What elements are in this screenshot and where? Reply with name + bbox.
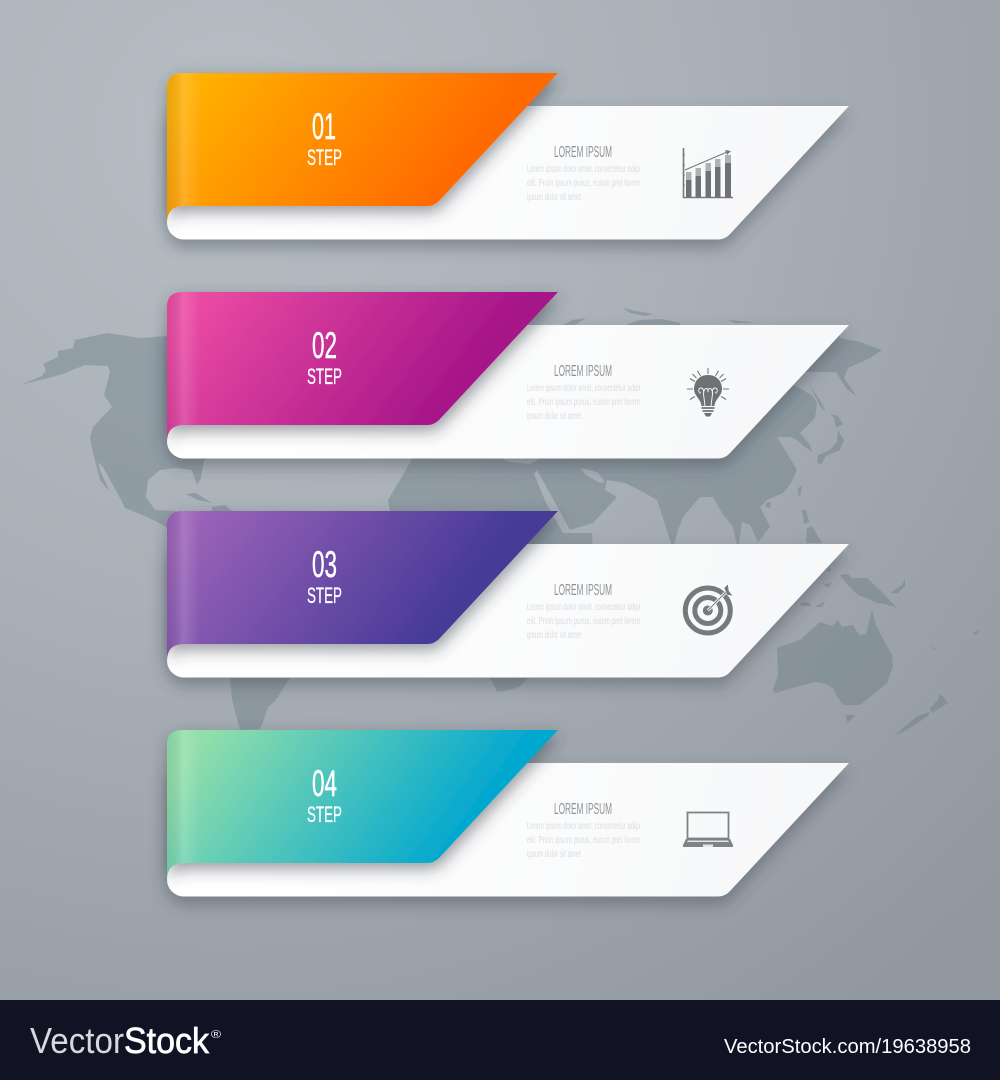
white card 2 bbox=[167, 325, 849, 458]
step 4 bbox=[167, 730, 849, 896]
icon: laptop bbox=[683, 812, 733, 847]
map: New Guinea bbox=[840, 574, 905, 608]
heading 4: LOREM IPSUM bbox=[554, 801, 612, 818]
body text 1: Lorem ipsum dolor amet, consectetur adipi bbox=[527, 164, 640, 175]
ribbon 3 bbox=[167, 511, 558, 661]
heading 3: LOREM IPSUM bbox=[554, 582, 612, 599]
footer logo: Vector bbox=[30, 1020, 124, 1061]
body text 1 bbox=[527, 164, 640, 203]
step 1 bbox=[167, 73, 849, 240]
footer logo bbox=[30, 1020, 221, 1061]
footer url: VectorStock.com/19638958 bbox=[724, 1036, 971, 1058]
body text 1: elit. Proin ipsum purus, euism pret lorem bbox=[527, 178, 640, 189]
body text 4 bbox=[527, 821, 640, 860]
white card 1 bbox=[167, 106, 849, 240]
white card 3 bbox=[167, 544, 849, 678]
body text 2: elit. Proin ipsum purus, euism pret lorem bbox=[527, 397, 640, 408]
number 01: 01 bbox=[312, 106, 336, 147]
step label 3: STEP bbox=[307, 583, 342, 608]
body text 4: elit. Proin ipsum purus, euism pret lorem bbox=[527, 835, 640, 846]
step 2 bbox=[167, 292, 849, 458]
map: Arctic islands bbox=[563, 308, 757, 326]
icon: target bbox=[685, 584, 733, 633]
map: Pacific islets bbox=[931, 629, 980, 650]
body text 3: elit. Proin ipsum purus, euism pret lorem bbox=[527, 616, 640, 627]
footer logo: ® bbox=[211, 1029, 221, 1041]
ribbon 1 bbox=[167, 73, 558, 223]
number 02: 02 bbox=[312, 325, 337, 366]
body text 3: Lorem ipsum dolor amet, consectetur adipi bbox=[527, 602, 640, 613]
body text 1: ipsum dolor sit amet bbox=[527, 192, 581, 203]
number 04: 04 bbox=[312, 763, 337, 804]
map: New Zealand bbox=[895, 693, 948, 735]
map: Caribbean islands bbox=[186, 493, 232, 511]
number 03: 03 bbox=[312, 544, 337, 585]
body text 4: ipsum dolor sit amet bbox=[527, 849, 581, 860]
icon: light bulb bbox=[687, 368, 729, 416]
body text 2 bbox=[527, 383, 640, 422]
map: Taiwan and Hainan bbox=[766, 486, 802, 508]
body text 3 bbox=[527, 602, 640, 641]
step label 2: STEP bbox=[307, 364, 342, 389]
white card 4 bbox=[167, 763, 849, 896]
map: Eurasia and Africa bbox=[388, 330, 882, 600]
icon: bar chart bbox=[683, 148, 733, 198]
step label 1: STEP bbox=[307, 145, 342, 170]
body text 2: ipsum dolor sit amet bbox=[527, 411, 581, 422]
body text 2: Lorem ipsum dolor amet, consectetur adipi bbox=[527, 383, 640, 394]
footer logo: Stock bbox=[124, 1020, 210, 1061]
heading 2: LOREM IPSUM bbox=[554, 363, 612, 380]
body text 4: Lorem ipsum dolor amet, consectetur adipi bbox=[527, 821, 640, 832]
body text 3: ipsum dolor sit amet bbox=[527, 630, 581, 641]
map: Philippines and Indonesia bbox=[800, 510, 832, 607]
map: Japan bbox=[817, 414, 844, 465]
map: North America bbox=[20, 333, 260, 530]
footer bar bbox=[0, 1000, 1000, 1080]
heading 1: LOREM IPSUM bbox=[554, 144, 612, 161]
map: Sakhalin bbox=[810, 386, 826, 412]
step 3 bbox=[167, 511, 849, 678]
ribbon 4 bbox=[167, 730, 558, 880]
map: Tasmania bbox=[845, 715, 855, 723]
map: South America bbox=[230, 678, 290, 730]
ribbon 2 bbox=[167, 292, 558, 442]
world map bbox=[20, 308, 980, 735]
map: Africa southern tip bbox=[490, 678, 528, 692]
map: Australia bbox=[773, 610, 893, 705]
step label 4: STEP bbox=[307, 802, 342, 827]
